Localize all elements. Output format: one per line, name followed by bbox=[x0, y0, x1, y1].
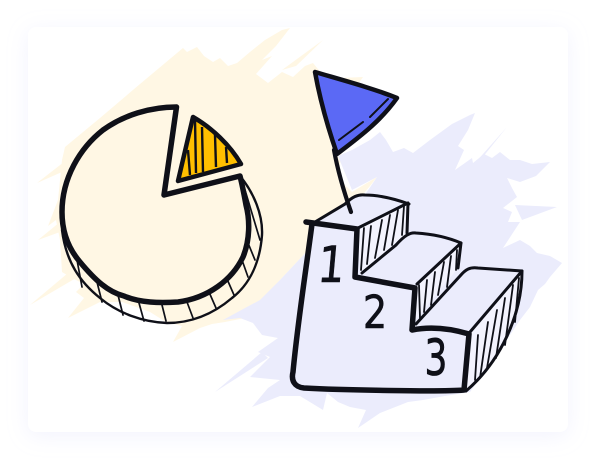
flag pole bbox=[334, 150, 351, 212]
pie body bbox=[62, 107, 249, 302]
step number 1: 1 bbox=[315, 236, 348, 294]
podium steps bbox=[292, 195, 523, 391]
podium top edges bbox=[315, 195, 522, 324]
podium side faces bbox=[358, 203, 523, 391]
brush stroke: yellow bbox=[30, 28, 377, 342]
pie rim bbox=[62, 176, 262, 323]
pie slice: orange bbox=[178, 117, 241, 181]
card background bbox=[28, 27, 568, 432]
step number 3: 3 bbox=[425, 330, 447, 388]
podium side edges bbox=[358, 203, 522, 391]
podium front outline bbox=[292, 222, 469, 391]
brush stroke: lavender bbox=[215, 113, 562, 428]
flag bbox=[315, 72, 397, 212]
pie chart bbox=[62, 107, 262, 323]
flag highlight bbox=[339, 99, 388, 140]
step number 2: 2 bbox=[363, 286, 387, 339]
flag banner bbox=[315, 72, 397, 154]
podium hatching bbox=[361, 206, 519, 380]
podium faces bbox=[293, 195, 522, 390]
